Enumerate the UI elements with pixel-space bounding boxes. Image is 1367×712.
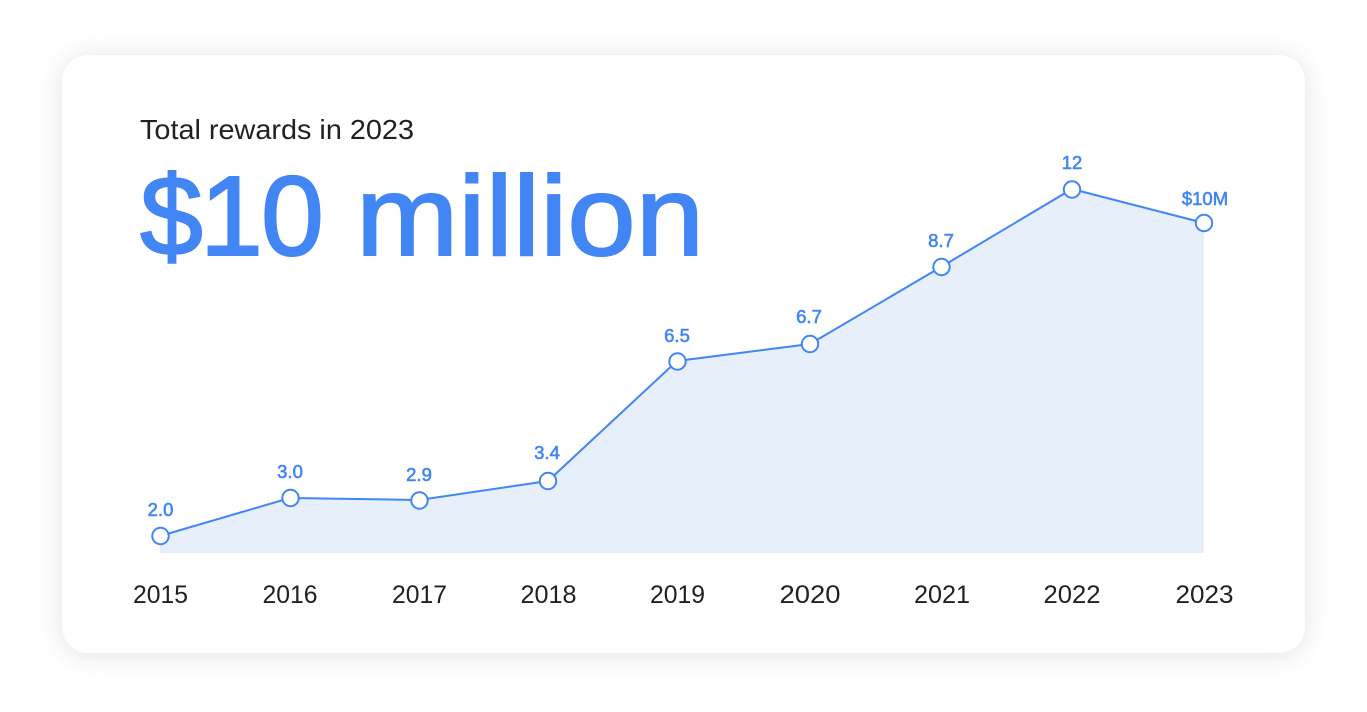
headline value: million (356, 153, 704, 279)
x axis years (133, 581, 1234, 609)
data labels: 12 (1062, 152, 1082, 173)
subtitle: Total rewards in 2023 (140, 114, 414, 145)
x axis years: 2019 (650, 581, 705, 609)
x axis years: 2020 (780, 581, 840, 609)
data points (152, 181, 1212, 544)
data labels: $10M (1182, 188, 1228, 209)
x axis years: 2017 (392, 581, 447, 609)
x axis years: 2016 (262, 581, 318, 609)
x axis years: 2022 (1044, 581, 1100, 609)
x axis years: 2018 (520, 581, 576, 609)
x axis years: 2021 (914, 581, 970, 609)
data labels (148, 152, 1228, 520)
data labels: 2.0 (148, 499, 173, 520)
data labels: 6.7 (796, 306, 822, 327)
x axis years: 2015 (133, 581, 188, 609)
data labels: 3.0 (277, 461, 303, 482)
data labels: 2.9 (406, 464, 432, 485)
trend line (160, 189, 1204, 536)
panel: card (62, 55, 1305, 653)
x axis years: 2023 (1176, 581, 1234, 609)
data labels: 3.4 (534, 442, 560, 463)
area fill (160, 189, 1204, 553)
data labels: 6.5 (664, 325, 690, 346)
data labels: 8.7 (928, 230, 954, 251)
headline value: $10 (140, 153, 324, 279)
